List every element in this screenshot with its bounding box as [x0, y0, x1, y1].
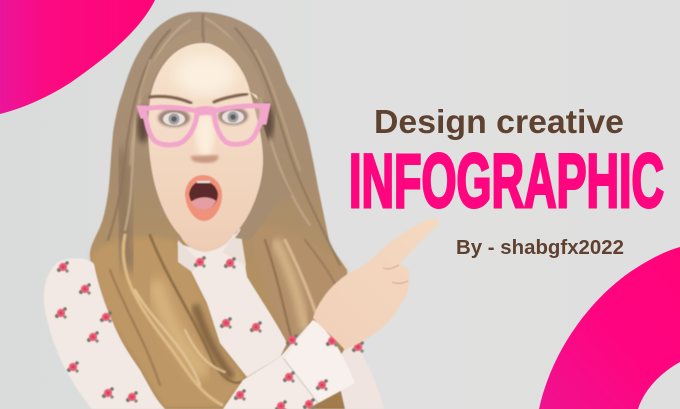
woman photo illustration: [44, 12, 439, 409]
byline: By - shabgfx2022: [456, 237, 624, 259]
hair: [90, 12, 380, 409]
decorative pink shape: top left: [0, 0, 155, 114]
shirt: torso and collar: [177, 228, 287, 377]
shirt: far sleeve: [335, 340, 384, 409]
heading: Design creative: Design creative: [374, 103, 624, 140]
shirt: left sleeve: [44, 258, 165, 409]
decorative pink ring: bottom right: [539, 247, 680, 409]
eyebrows: [150, 94, 247, 103]
pink glasses: [137, 104, 270, 145]
mouth: [185, 175, 222, 221]
face: [148, 43, 264, 248]
shirt: forearm and cuff: [223, 320, 364, 409]
left eye: [158, 109, 190, 127]
neck: [177, 200, 238, 252]
hand pointing: [313, 218, 439, 350]
front hair beside face: [140, 28, 292, 240]
right eye: [218, 107, 248, 125]
